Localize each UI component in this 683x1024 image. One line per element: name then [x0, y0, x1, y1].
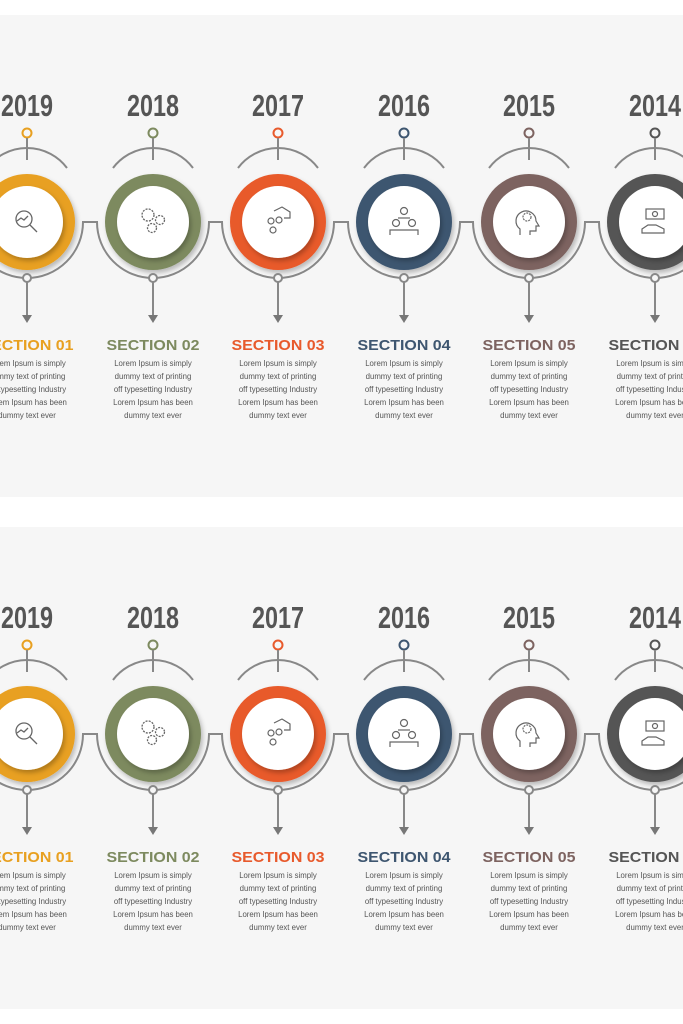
unit 2014: dummy text ever	[626, 923, 683, 932]
unit 2015	[481, 600, 577, 932]
unit 2017: Lorem Ipsum is simply	[239, 871, 317, 880]
unit 2016: off typesetting Industry	[365, 385, 443, 394]
unit 2015: off typesetting Industry	[490, 897, 568, 906]
connector line	[0, 222, 683, 278]
unit 2016: off typesetting Industry	[365, 897, 443, 906]
unit 2015: Lorem Ipsum has been	[489, 398, 569, 407]
unit 2015	[481, 88, 577, 420]
unit 2017: Lorem Ipsum has been	[238, 398, 318, 407]
unit 2018: 2018	[127, 600, 179, 635]
unit 2016: SECTION 04	[358, 849, 451, 866]
unit 2014: dummy text ever	[626, 411, 683, 420]
unit 2019	[0, 88, 75, 420]
unit 2018: dummy text of printing	[115, 372, 191, 381]
unit 2015: dummy text of printing	[491, 884, 567, 893]
unit 2015: Lorem Ipsum is simply	[490, 871, 568, 880]
unit 2016: Lorem Ipsum has been	[364, 398, 444, 407]
unit 2014	[607, 88, 683, 420]
unit 2018: 2018	[127, 88, 179, 123]
unit 2017: off typesetting Industry	[239, 385, 317, 394]
unit 2019	[0, 600, 75, 932]
unit 2018	[105, 600, 201, 932]
unit 2017: Lorem Ipsum is simply	[239, 359, 317, 368]
unit 2016: dummy text ever	[375, 411, 433, 420]
unit 2016	[356, 88, 452, 420]
unit 2015: SECTION 05	[482, 849, 576, 866]
unit 2018: Lorem Ipsum is simply	[114, 359, 192, 368]
unit 2017	[230, 600, 326, 932]
unit 2016: 2016	[378, 600, 430, 635]
unit 2018: dummy text of printing	[115, 884, 191, 893]
unit 2015: 2015	[503, 88, 555, 123]
unit 2017: dummy text ever	[249, 923, 307, 932]
unit 2018: off typesetting Industry	[114, 897, 192, 906]
unit 2017: SECTION 03	[232, 337, 324, 354]
unit 2018: Lorem Ipsum is simply	[114, 871, 192, 880]
unit 2018: off typesetting Industry	[114, 385, 192, 394]
unit 2015: 2015	[503, 600, 555, 635]
unit 2015: dummy text ever	[500, 411, 558, 420]
unit 2016: dummy text ever	[375, 923, 433, 932]
unit 2015: Lorem Ipsum has been	[489, 910, 569, 919]
unit 2018: dummy text ever	[124, 923, 182, 932]
unit 2017: dummy text of printing	[240, 884, 316, 893]
panel: timeline top	[0, 15, 683, 497]
unit 2015: dummy text ever	[500, 923, 558, 932]
unit 2017: dummy text of printing	[240, 372, 316, 381]
unit 2018: SECTION 02	[106, 849, 200, 866]
unit 2016: Lorem Ipsum has been	[364, 910, 444, 919]
unit 2017	[230, 88, 326, 420]
unit 2017: Lorem Ipsum has been	[238, 910, 318, 919]
unit 2017: 2017	[252, 88, 304, 123]
unit 2018: dummy text ever	[124, 411, 182, 420]
unit 2016: 2016	[378, 88, 430, 123]
unit 2017: SECTION 03	[232, 849, 324, 866]
unit 2015: off typesetting Industry	[490, 385, 568, 394]
unit 2017: off typesetting Industry	[239, 897, 317, 906]
unit 2018: SECTION 02	[106, 337, 200, 354]
panel: timeline bottom	[0, 527, 683, 1009]
unit 2016: dummy text of printing	[366, 372, 442, 381]
unit 2019: 2019	[1, 88, 53, 123]
unit 2016	[356, 600, 452, 932]
unit 2017: 2017	[252, 600, 304, 635]
unit 2017: dummy text ever	[249, 411, 307, 420]
unit 2015: Lorem Ipsum is simply	[490, 359, 568, 368]
unit 2018	[105, 88, 201, 420]
unit 2016: Lorem Ipsum is simply	[365, 871, 443, 880]
unit 2014	[607, 600, 683, 932]
unit 2016: Lorem Ipsum is simply	[365, 359, 443, 368]
unit 2016: SECTION 04	[358, 337, 451, 354]
unit 2016: dummy text of printing	[366, 884, 442, 893]
unit 2019: 2019	[1, 600, 53, 635]
unit 2018: Lorem Ipsum has been	[113, 398, 193, 407]
unit 2015: dummy text of printing	[491, 372, 567, 381]
unit 2015: SECTION 05	[482, 337, 576, 354]
connector line	[0, 734, 683, 790]
unit 2018: Lorem Ipsum has been	[113, 910, 193, 919]
